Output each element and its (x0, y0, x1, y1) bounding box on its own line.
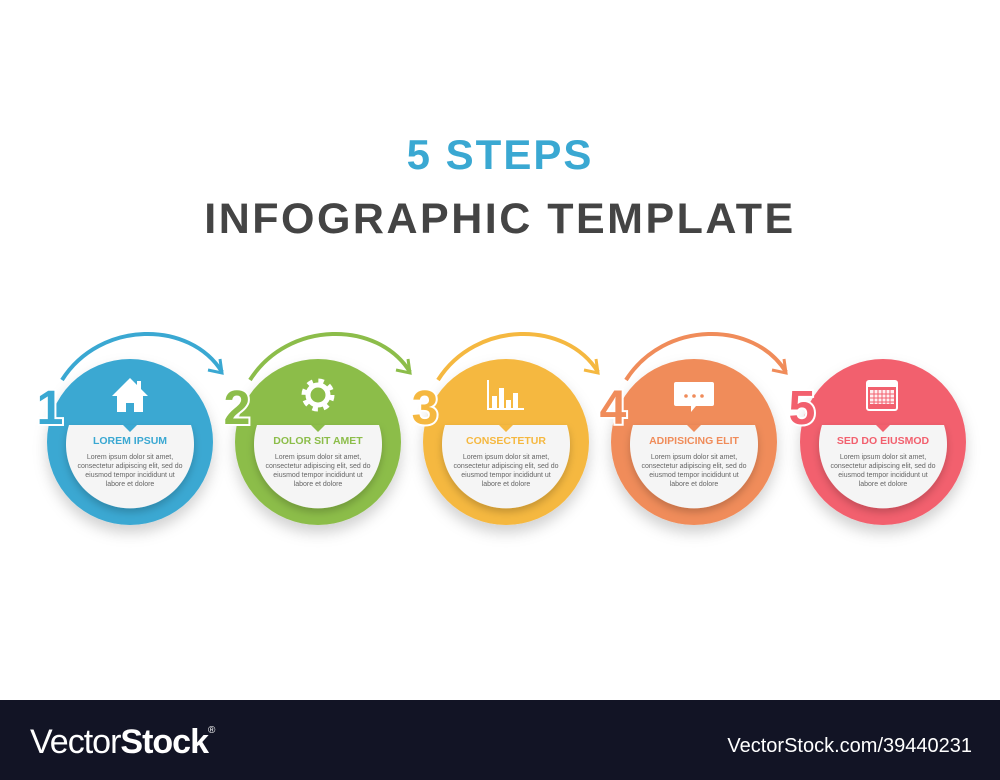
step 4: ADIPISICING ELIT (649, 435, 740, 447)
step 2: DOLOR SIT AMET (273, 435, 363, 447)
step 1: labore et dolore (106, 481, 154, 488)
step 5: Lorem ipsum dolor sit amet, (840, 454, 926, 461)
icon: calendar (867, 381, 897, 410)
step 3: Lorem ipsum dolor sit amet, (463, 454, 549, 461)
step 4: 4 (600, 382, 627, 435)
step 2: consectetur adipiscing elit, sed do (265, 463, 371, 470)
step 3: eiusmod tempor incididunt ut (461, 472, 551, 479)
title: 5 steps: 5 STEPS (407, 131, 593, 178)
icon: gear (305, 382, 331, 408)
step 2: eiusmod tempor incididunt ut (273, 472, 363, 479)
step 4: consectetur adipiscing elit, sed do (641, 463, 747, 470)
step 3: consectetur adipiscing elit, sed do (453, 463, 559, 470)
footer bar (0, 700, 1000, 780)
step 4: eiusmod tempor incididunt ut (649, 472, 739, 479)
step 2: Lorem ipsum dolor sit amet, (275, 454, 361, 461)
footer bar: ® (208, 725, 216, 736)
icon: chat bubble (674, 382, 714, 412)
step 1: eiusmod tempor incididunt ut (85, 472, 175, 479)
footer bar: VectorStock (30, 723, 208, 761)
step 5 (789, 359, 966, 525)
step 5: consectetur adipiscing elit, sed do (830, 463, 936, 470)
step 1 (37, 334, 222, 525)
step 1: 1 (37, 382, 63, 435)
step 3: labore et dolore (482, 481, 530, 488)
step 3: 3 (412, 382, 438, 435)
icon: house (112, 378, 148, 412)
step 3: CONSECTETUR (466, 435, 546, 447)
icon: bar chart (487, 380, 524, 410)
step 3 (412, 334, 598, 525)
step 1: Lorem ipsum dolor sit amet, (87, 454, 173, 461)
step 1: consectetur adipiscing elit, sed do (77, 463, 183, 470)
step 2 (224, 334, 410, 525)
step 2: labore et dolore (294, 481, 342, 488)
step 5: eiusmod tempor incididunt ut (838, 472, 928, 479)
step 4: Lorem ipsum dolor sit amet, (651, 454, 737, 461)
step 1: LOREM IPSUM (93, 435, 167, 447)
step 4: labore et dolore (670, 481, 718, 488)
title: infographic template: INFOGRAPHIC TEMPLATE (204, 195, 796, 243)
step 5: SED DO EIUSMOD (837, 435, 930, 447)
step 4 (600, 334, 786, 525)
step 5: 5 (789, 382, 815, 435)
step 5: labore et dolore (859, 481, 907, 488)
footer bar: VectorStock.com/39440231 (727, 735, 972, 757)
step 2: 2 (224, 382, 250, 435)
